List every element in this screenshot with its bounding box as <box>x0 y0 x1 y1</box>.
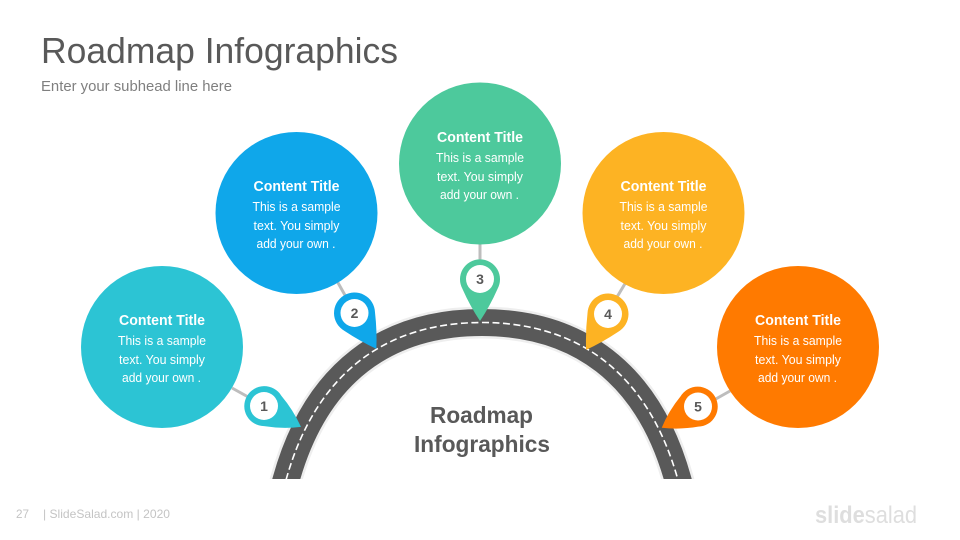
panel: step 5 circle: This is a sample <box>754 334 842 348</box>
connector lines <box>232 244 730 400</box>
panel: step 5 circle: text. You simply <box>755 353 842 367</box>
panel: step 2 circle: Content Title <box>254 179 340 195</box>
panel: step 3 circle: Content Title <box>437 130 523 146</box>
icon: map pin 1: 1 <box>260 398 268 414</box>
footer text: | SlideSalad.com | 2020 <box>43 507 170 521</box>
subhead: Enter your subhead line here <box>41 78 232 95</box>
icon: map pin 4: 4 <box>604 306 612 322</box>
panel: step 2 circle: text. You simply <box>254 219 340 233</box>
panel: step 4 circle: text. You simply <box>620 219 707 233</box>
panel: step 3 circle <box>399 82 561 244</box>
center label: Roadmap <box>430 402 533 428</box>
panel: step 3 circle: This is a sample <box>436 151 524 165</box>
panel: step 5 circle: add your own . <box>758 371 837 385</box>
panel: step 1 circle: Content Title <box>119 313 205 329</box>
roadmap road arch <box>283 322 681 490</box>
center label <box>414 402 550 457</box>
icon: map pin 4 <box>569 286 636 361</box>
panel: step 4 circle: add your own . <box>624 237 702 251</box>
icon: map pin 5: 5 <box>694 398 702 414</box>
icon: map pin 3: 3 <box>476 271 484 287</box>
panel: step 5 circle <box>717 266 879 428</box>
icon: map pin 5 <box>652 379 725 445</box>
panel: step 4 circle <box>582 132 744 294</box>
panel: step 3 circle: add your own . <box>440 188 519 202</box>
icon: map pin 2: 2 <box>351 305 359 321</box>
page number: 27 <box>16 507 29 521</box>
panel: step 2 circle: add your own . <box>256 237 336 251</box>
panel: step 2 circle <box>216 132 378 294</box>
icon: map pin 2 <box>326 285 394 360</box>
panel: step 4 circle: This is a sample <box>620 200 708 214</box>
icon: map pin 3 <box>460 259 500 321</box>
panel: step 1 circle: add your own . <box>122 371 201 385</box>
panel: step 5 circle: Content Title <box>755 313 841 329</box>
panel: step 1 circle <box>81 266 243 428</box>
panel: step 3 circle: text. You simply <box>437 170 524 184</box>
center label: Infographics <box>414 431 550 457</box>
panel: step 1 circle: This is a sample <box>118 334 206 348</box>
title: Roadmap Infographics <box>41 30 398 71</box>
icon: map pin 1 <box>237 379 311 444</box>
panel: step 4 circle: Content Title <box>620 179 706 195</box>
logo wordmark: slidesalad <box>815 502 917 529</box>
panel: step 2 circle: This is a sample <box>252 200 341 214</box>
panel: step 1 circle: text. You simply <box>119 353 206 367</box>
